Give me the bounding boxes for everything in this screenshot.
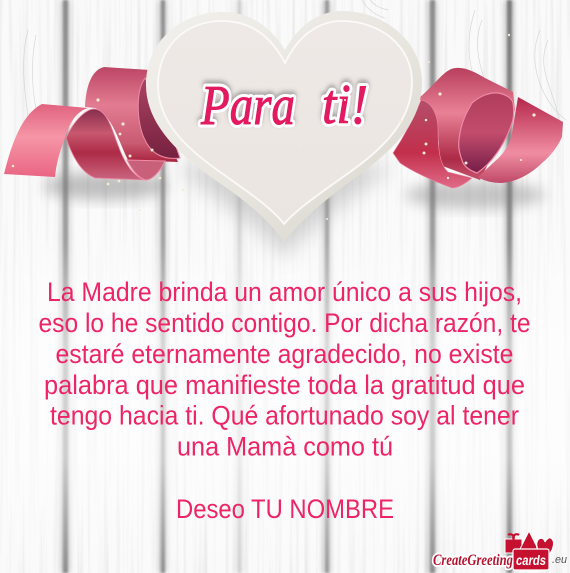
icon: tree <box>518 531 540 553</box>
message text: Deseo TU NOMBRE <box>176 494 394 524</box>
message text: estaré eternamente agradecido, no existe <box>56 339 514 369</box>
logo word: CreateGreeting: CreateGreeting <box>433 552 513 569</box>
middle sheet <box>66 109 146 180</box>
shadows under heart and ribbons <box>43 165 545 258</box>
message text <box>38 277 530 524</box>
lower fold <box>127 160 165 180</box>
logo suffix: .eu: .eu <box>552 554 567 566</box>
ribbon: right <box>393 68 563 188</box>
message text: La Madre brinda un amor único a sus hijos, <box>47 277 522 307</box>
ribbon: left <box>4 67 180 180</box>
title ink: Para <box>200 75 295 137</box>
icon: gift <box>505 534 522 553</box>
title: Para ti!: Para <box>200 75 295 137</box>
back loop <box>85 67 178 162</box>
message text: palabra que manifieste toda la gratitud que <box>44 370 525 400</box>
upper sheet <box>420 68 515 180</box>
ribbon tail <box>4 104 88 177</box>
right tail <box>478 97 563 183</box>
icon: heart <box>537 538 554 558</box>
heart rim <box>146 11 422 243</box>
heart face <box>158 21 412 224</box>
title ink <box>200 74 368 137</box>
lower dark sheet <box>393 100 472 188</box>
message text: tengo hacia ti. Qué afortunado soy al tener <box>50 400 519 430</box>
heart <box>146 11 422 243</box>
title ink: ti! <box>322 74 368 136</box>
message text: eso lo he sentido contigo. Por dicha razón, te <box>38 308 530 338</box>
title: Para ti! <box>200 74 368 137</box>
title: Para ti!: ti! <box>322 74 368 136</box>
message text: una Mamà como tú <box>177 432 393 462</box>
loop interior <box>138 78 180 158</box>
logo: CreateGreetingCards.eu <box>433 531 567 570</box>
loop interior <box>459 93 514 173</box>
sparkles <box>12 34 536 220</box>
logo box: cards: cards <box>516 552 546 568</box>
